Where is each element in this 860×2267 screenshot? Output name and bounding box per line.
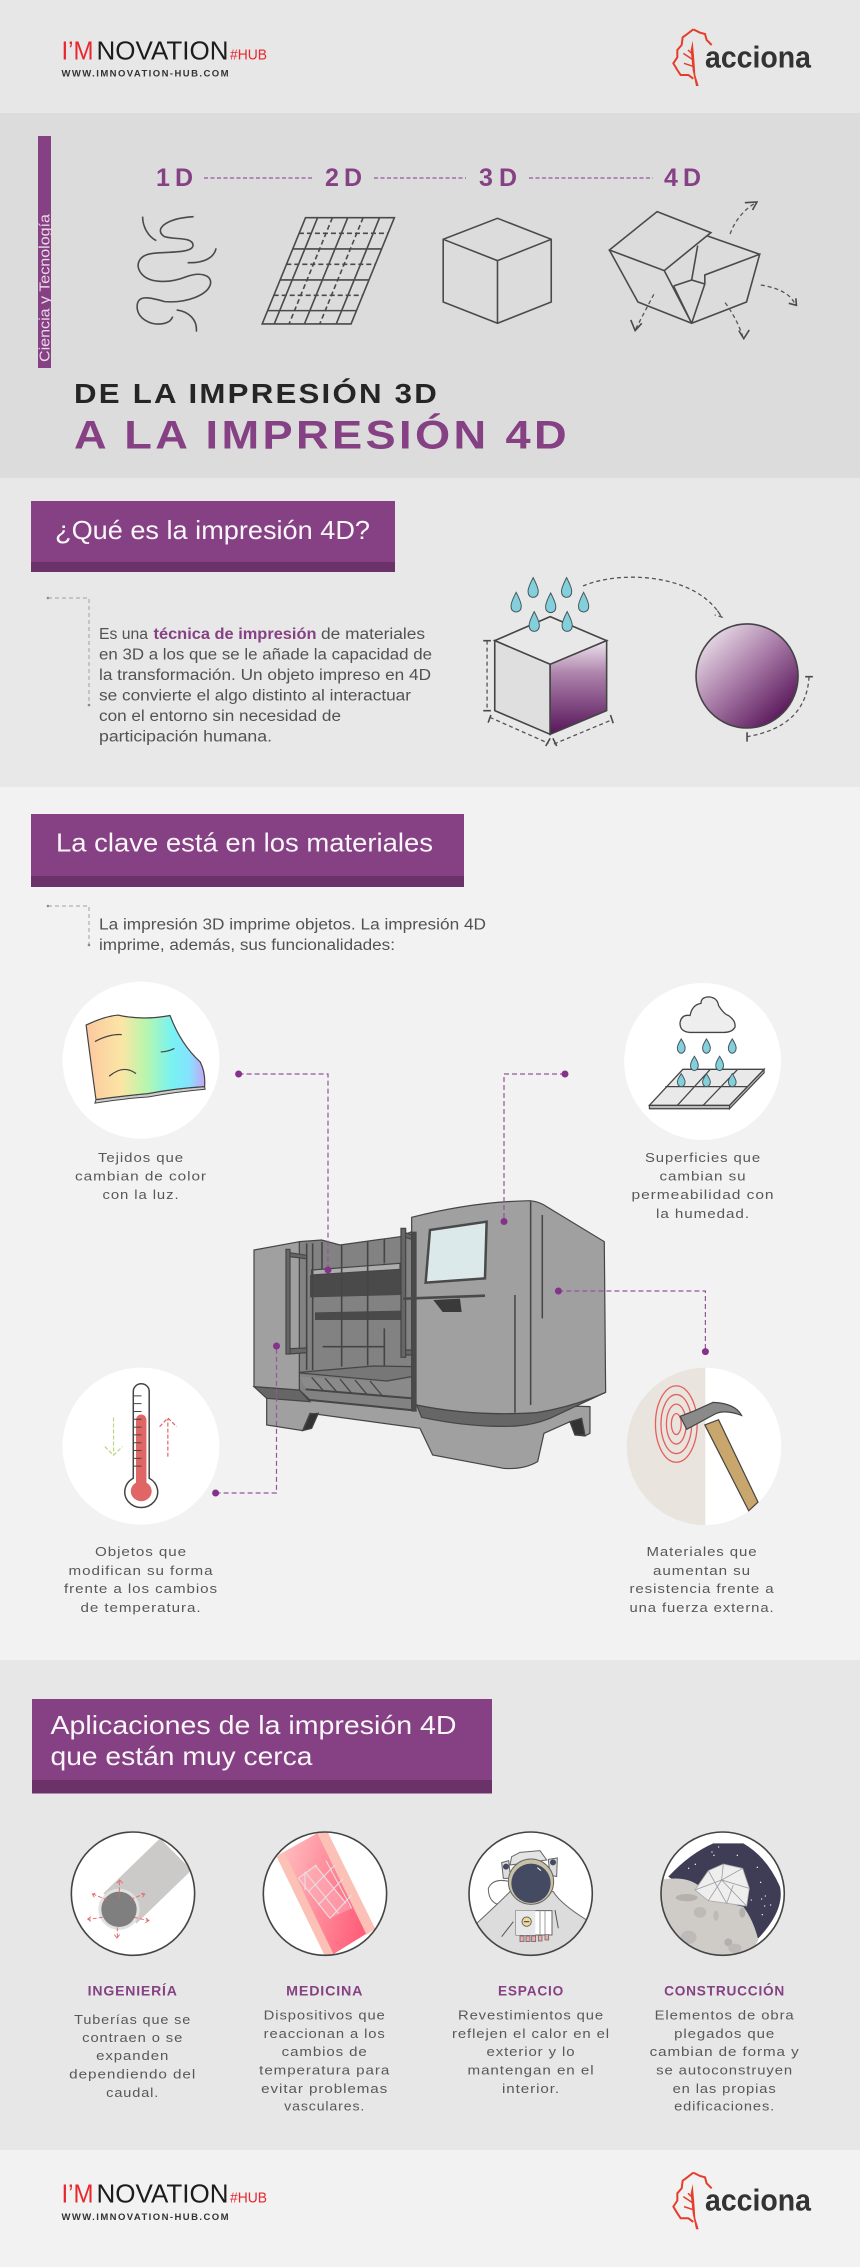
text block: definition: participación humana. — [99, 728, 272, 746]
caption: objects: Objetos que — [95, 1544, 187, 1559]
logo: I'MNOVATION footer — [62, 2179, 267, 2223]
dimension labels 1D to 4D — [156, 164, 701, 192]
application: construction: edificaciones. — [674, 2098, 775, 2114]
caption: materials: una fuerza externa. — [630, 1600, 774, 1615]
hero band — [0, 113, 860, 478]
icon: medical stent — [263, 1830, 387, 1958]
arrow: transformation — [583, 577, 722, 617]
icon: astronaut — [469, 1832, 592, 1960]
caption: objects: modifican su forma — [68, 1563, 214, 1578]
caption: surfaces — [632, 1150, 774, 1221]
printer feet — [303, 1413, 585, 1435]
application: engineering: expanden — [96, 2048, 169, 2063]
text block: definition: se convierte el algo distinto al interactuar — [99, 688, 411, 704]
caption: fabrics: cambian de color — [75, 1168, 207, 1184]
connector: materials to printer — [555, 1288, 709, 1355]
application: construction: plegados que — [674, 2026, 775, 2041]
dimension labels 1D to 4D: 2D — [325, 164, 362, 192]
logo: I'MNOVATION footer: NOVATION — [96, 2179, 228, 2209]
caption: surfaces: permeabilidad con — [632, 1187, 774, 1202]
application: engineering — [69, 1982, 196, 2100]
icon: colour-changing fabric — [63, 982, 219, 1139]
application: engineering: contraen o se — [82, 2030, 183, 2045]
application: construction: en las propias — [673, 2081, 777, 2096]
text block: definition: de materiales — [321, 626, 425, 643]
icon: 2D grid — [262, 218, 394, 324]
application: engineering: dependiendo del — [69, 2066, 196, 2082]
connector: fabric to printer — [235, 1070, 332, 1274]
text block: definition — [99, 626, 432, 746]
printer shelf — [403, 1294, 485, 1312]
caption: surfaces: cambian su — [660, 1168, 746, 1184]
cube — [495, 617, 607, 734]
section band: applications — [0, 1660, 860, 2150]
text block: definition: la transformación. Un objeto impreso en 4D — [99, 667, 431, 684]
logo: I'MNOVATION header: NOVATION — [96, 35, 228, 65]
application: construction — [650, 1982, 800, 2114]
logo: I'MNOVATION header: I’M — [62, 35, 94, 65]
application: construction: se autoconstruyen — [656, 2062, 793, 2078]
icon: engineering pipe — [71, 1832, 195, 1955]
caption: materials: Materiales que — [646, 1544, 758, 1559]
heading: materials: La clave está en los materiales — [56, 828, 433, 858]
text block: materials intro — [99, 916, 486, 954]
icon: hammer on resistant material — [627, 1368, 781, 1525]
heading: what is 4D printing: ¿Qué es la impresión 4D? — [55, 515, 370, 545]
application: construction: CONSTRUCCIÓN — [664, 1982, 785, 1998]
illustration: cube transforming into sphere with water — [483, 577, 813, 746]
caption: surfaces: la humedad. — [656, 1206, 750, 1221]
category tab — [38, 136, 54, 368]
caption: materials: resistencia frente a — [630, 1581, 774, 1596]
application: medicine — [259, 1982, 390, 2114]
text block: definition: con el entorno sin necesidad de — [99, 708, 341, 725]
application: construction: Elementos de obra — [655, 2008, 795, 2022]
caption: materials: aumentan su — [653, 1563, 751, 1578]
icon: 4D unfolding cube — [609, 202, 796, 339]
printer screen — [426, 1222, 487, 1283]
caption: materials — [630, 1544, 774, 1615]
application: engineering: caudal. — [106, 2085, 159, 2100]
logo: I'MNOVATION header — [62, 35, 267, 80]
logo: acciona header — [673, 29, 812, 86]
icon: rain on permeable surface — [624, 983, 781, 1140]
application: engineering: INGENIERÍA — [88, 1982, 178, 1998]
connector: surface to printer — [500, 1070, 568, 1225]
caption: fabrics — [75, 1150, 207, 1202]
logo: I'MNOVATION footer: WWW.IMNOVATION-HUB.COM — [62, 2212, 229, 2223]
connector: objects to printer — [212, 1342, 280, 1496]
application: space: exterior y lo — [486, 2044, 576, 2059]
heading: materials — [31, 814, 464, 887]
caption: surfaces: Superficies que — [645, 1150, 761, 1165]
heading: what is 4D printing — [31, 501, 395, 572]
section band: materials — [0, 787, 860, 1660]
category tab: Ciencia y Tecnología — [38, 213, 54, 362]
application: medicine: evitar problemas — [261, 2081, 388, 2096]
application: space: interior. — [502, 2081, 560, 2096]
icon: 3D cube — [443, 218, 551, 323]
application: engineering: Tuberías que se — [74, 2012, 191, 2027]
text block: materials intro: La impresión 3D imprime objetos. La impresión 4D — [99, 916, 486, 934]
callout line: definition — [47, 597, 90, 706]
heading: applications: Aplicaciones de la impresión 4D — [50, 1710, 456, 1740]
application: space: Revestimientos que — [458, 2008, 604, 2022]
logo: I'MNOVATION header: #HUB — [230, 46, 267, 63]
title — [74, 378, 570, 457]
caption: objects: frente a los cambios — [64, 1581, 218, 1596]
text block: definition: en 3D a los que se le añade la capacidad de — [99, 646, 432, 664]
logo: I'MNOVATION header: WWW.IMNOVATION-HUB.COM — [62, 69, 229, 80]
caption: fabrics: Tejidos que — [98, 1150, 184, 1165]
icon: 1D lines — [137, 217, 216, 332]
application: medicine: reaccionan a los — [264, 2026, 386, 2041]
title: DE LA IMPRESIÓN 3D — [74, 378, 439, 409]
title: A LA IMPRESIÓN 4D — [74, 411, 570, 457]
dimension labels 1D to 4D: 4D — [664, 164, 701, 192]
caption: fabrics: con la luz. — [102, 1187, 180, 1202]
application: construction: cambian de forma y — [650, 2044, 800, 2059]
application: space: mantengan en el — [468, 2062, 594, 2078]
application: medicine: cambios de — [282, 2044, 368, 2059]
application: space — [452, 1982, 610, 2096]
dimension labels 1D to 4D: 3D — [479, 164, 517, 192]
application: space: ESPACIO — [498, 1982, 564, 1998]
application: medicine: Dispositivos que — [264, 2008, 386, 2022]
printer base — [267, 1398, 590, 1469]
icon: thermometer — [63, 1368, 219, 1525]
printer right body — [412, 1201, 606, 1414]
callout line: materials intro — [47, 905, 90, 946]
logo: acciona footer: acciona — [705, 2183, 812, 2218]
footer band — [0, 2150, 860, 2267]
application: medicine: vasculares. — [284, 2098, 365, 2114]
application: space: reflejen el calor en el — [452, 2026, 610, 2041]
printer dark bands — [254, 1387, 606, 1426]
logo: acciona footer — [673, 2173, 812, 2229]
heading: applications — [32, 1699, 492, 1794]
dimension labels 1D to 4D: 1D — [156, 164, 193, 192]
water drops — [511, 578, 589, 631]
3D printer illustration — [254, 1201, 606, 1469]
printer right door — [401, 1228, 417, 1412]
caption: objects: de temperatura. — [80, 1600, 202, 1615]
text block: definition: técnica de impresión — [154, 626, 316, 643]
header band — [0, 0, 860, 113]
sphere — [696, 624, 798, 728]
section band: what is 4D — [0, 478, 860, 787]
application: medicine: temperatura para — [259, 2062, 390, 2078]
printer chamber — [296, 1232, 417, 1411]
logo: I'MNOVATION footer: I’M — [62, 2179, 94, 2209]
text block: materials intro: imprime, además, sus funcionalidades: — [99, 937, 395, 954]
text block: definition: Es una — [99, 626, 148, 643]
icon: self-building construction — [657, 1832, 784, 1960]
logo: acciona header: acciona — [705, 39, 812, 74]
caption: objects — [64, 1544, 218, 1615]
heading: applications: que están muy cerca — [50, 1741, 313, 1771]
printer left door — [254, 1242, 307, 1390]
application: medicine: MEDICINA — [286, 1982, 363, 1998]
logo: I'MNOVATION footer: #HUB — [230, 2190, 267, 2207]
dimension marks — [483, 641, 813, 746]
